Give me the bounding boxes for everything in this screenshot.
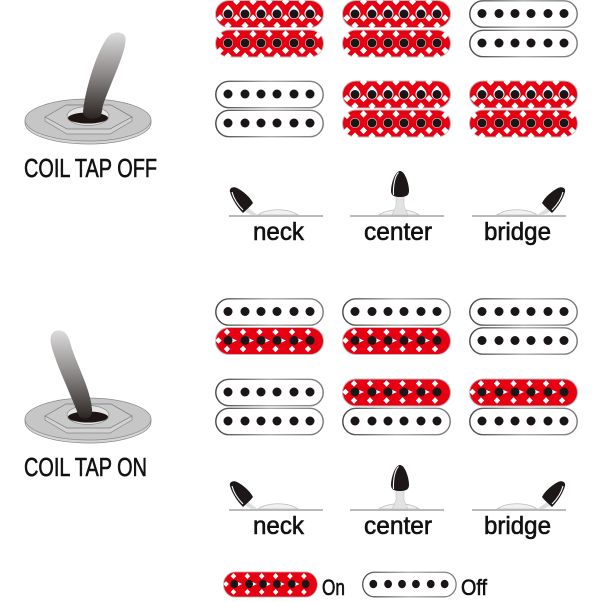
heading: coil tap off: COIL TAP OFF: [24, 153, 157, 183]
selector: off bridge: [472, 187, 566, 216]
label: bridge: bridge: [484, 218, 551, 246]
pickup pair: on bridge row 1: [470, 299, 577, 354]
selector: on neck: [229, 481, 323, 510]
label: neck: neck: [253, 218, 304, 246]
panel: coil tap on switch: [24, 330, 151, 482]
legend: [223, 572, 488, 600]
pickup pair: off neck row 1: [216, 0, 324, 60]
label: neck: neck: [253, 512, 304, 540]
selector: off center: [350, 171, 444, 216]
legend label: on: On: [322, 575, 345, 600]
pickup pair: off center row 1: [342, 0, 450, 60]
pickup pair: off bridge row 2: [470, 78, 578, 140]
heading: coil tap on: COIL TAP ON: [24, 452, 147, 482]
pickup pair: on neck row 1: [215, 299, 324, 354]
icon: toggle switch on: [25, 330, 151, 443]
pickup pair: on center row 1: [342, 299, 450, 354]
selector: off neck: [229, 187, 323, 216]
panel: coil tap on pickup diagrams: [215, 299, 578, 435]
pickup pair: off bridge row 1: [470, 1, 577, 57]
pickup pair: on center row 2: [342, 379, 450, 435]
panel: coil tap off pickup diagrams: [216, 0, 578, 140]
legend label: off: Off: [461, 575, 488, 600]
label: center: center: [364, 218, 432, 246]
pickup pair: off center row 2: [342, 78, 450, 140]
panel: coil tap off switch: [24, 32, 157, 183]
icon: toggle switch off: [25, 32, 151, 144]
label: center: center: [364, 512, 432, 540]
legend swatch: on: [223, 572, 317, 597]
label: bridge: bridge: [484, 512, 551, 540]
pickup pair: on neck row 2: [216, 379, 323, 435]
pickup pair: on bridge row 2: [469, 379, 578, 435]
legend swatch: off: [363, 572, 456, 597]
pickup pair: off neck row 2: [216, 81, 323, 137]
selector: on bridge: [472, 481, 566, 510]
selector: on center: [350, 465, 444, 510]
